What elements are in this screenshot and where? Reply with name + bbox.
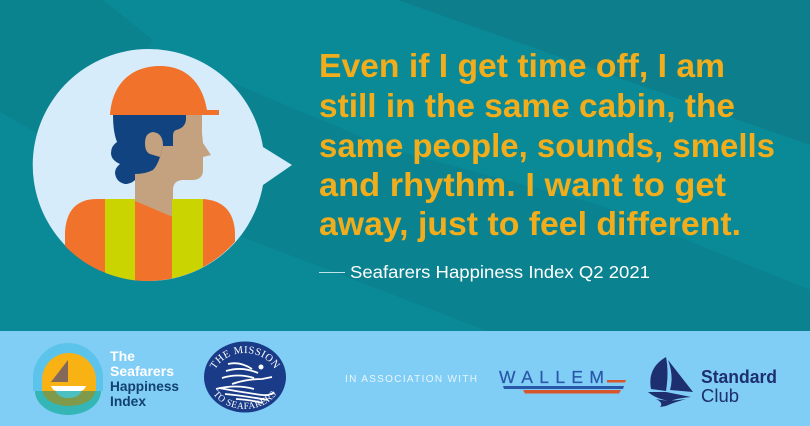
icon: sailing ship xyxy=(648,357,693,407)
hard hat xyxy=(110,66,219,115)
orange vest body xyxy=(65,199,235,290)
wordmark: Standard xyxy=(701,367,777,387)
logo wordmark: Happiness xyxy=(110,378,179,394)
neck v-shape xyxy=(135,199,172,216)
quote text: Even if I get time off, I am xyxy=(319,47,725,84)
logo: Wallem: WALLEM xyxy=(499,367,604,387)
ear xyxy=(145,132,163,157)
quote text xyxy=(319,47,775,242)
quote text: and rhythm. I want to get xyxy=(319,166,726,203)
logo mark xyxy=(33,343,103,415)
association label: IN ASSOCIATION WITH xyxy=(345,374,477,385)
yellow reflective strip left xyxy=(105,199,135,289)
quote text: still in the same cabin, the xyxy=(319,87,735,124)
attribution: Seafarers Happiness Index Q2 2021 xyxy=(350,262,650,282)
hair xyxy=(111,115,186,184)
panel: teal background xyxy=(0,0,810,332)
neck and face xyxy=(135,115,211,198)
logo wordmark: Index xyxy=(110,393,146,409)
speech bubble xyxy=(33,49,292,281)
panel: footer band xyxy=(0,331,810,426)
yellow reflective strip right xyxy=(172,199,203,278)
logo: Standard Club xyxy=(648,357,777,407)
logo wordmark xyxy=(110,348,179,409)
logo wordmark: Seafarers xyxy=(110,363,174,379)
angel head xyxy=(258,364,264,370)
circular lettering top: THE MISSION xyxy=(209,346,280,368)
logo: Mission to Seafarers xyxy=(204,342,286,412)
quote text: same people, sounds, smells xyxy=(319,127,775,164)
logo: Standard Club: Club xyxy=(701,386,739,406)
speech bubble with worker illustration xyxy=(33,49,292,290)
logo wordmark: The xyxy=(110,348,135,364)
icon: worker portrait xyxy=(65,115,235,290)
quote text: away, just to feel different. xyxy=(319,205,741,242)
waves and angel xyxy=(216,363,274,403)
logo: Seafarers Happiness Index xyxy=(33,343,179,415)
logo: Wallem xyxy=(499,367,626,394)
circular lettering bottom: TO SEAFARERS xyxy=(214,390,276,410)
